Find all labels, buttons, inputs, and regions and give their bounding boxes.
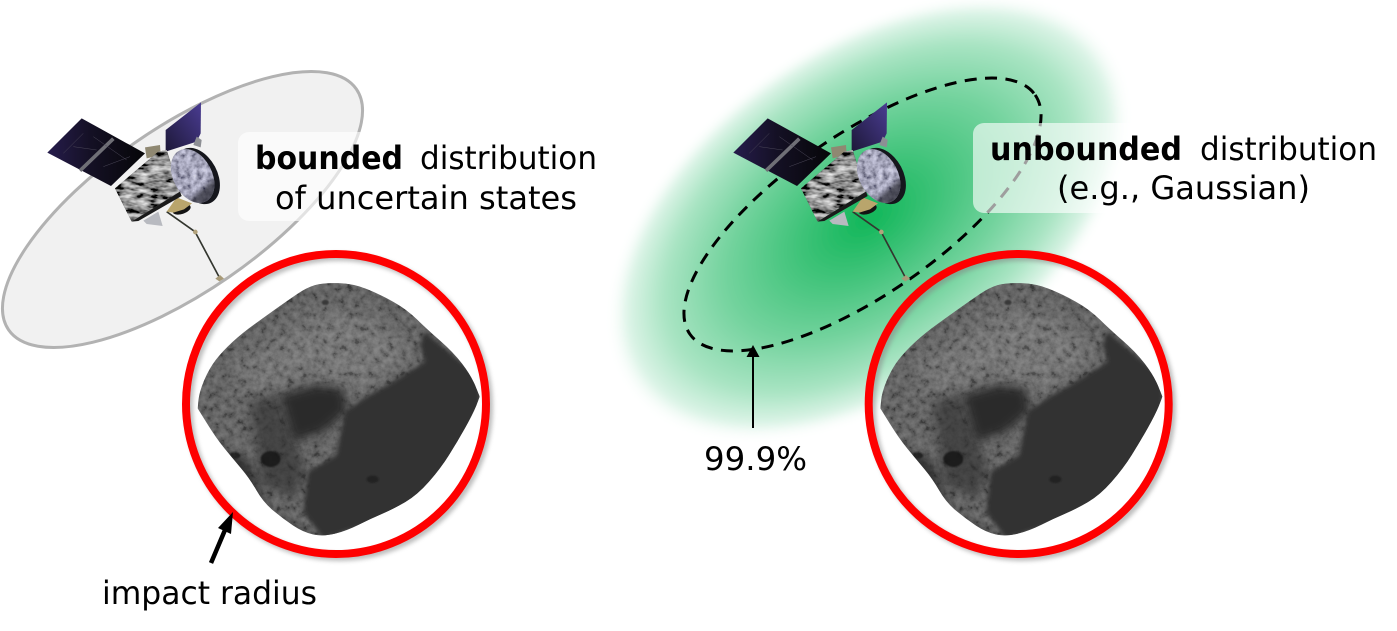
unbounded label: distribution	[1200, 130, 1377, 168]
panel: bounded distribution	[0, 22, 608, 612]
panel: unbounded distribution	[526, 0, 1397, 557]
bounded label: bounded	[255, 139, 403, 177]
arrow: 99.9 percent	[746, 345, 760, 428]
spacecraft: unbounded panel	[733, 102, 915, 281]
arrow: impact radius	[211, 512, 233, 563]
spacecraft: bounded panel	[47, 102, 229, 281]
99.9 percent label: 99.9%	[704, 440, 807, 478]
asteroid: bounded panel	[193, 278, 487, 542]
label background: unbounded	[973, 123, 1397, 213]
bounded label: of uncertain states	[275, 179, 577, 217]
unbounded label: (e.g., Gaussian)	[1057, 169, 1310, 207]
unbounded label: unbounded	[990, 130, 1182, 168]
bounded label: distribution	[420, 139, 597, 177]
asteroid: unbounded panel	[876, 278, 1169, 542]
gaussian glow	[526, 0, 1212, 533]
impact radius ring	[869, 254, 1172, 557]
label background: bounded	[238, 132, 608, 221]
99.9 percent dashed ellipse	[644, 29, 1081, 400]
impact radius ring	[186, 254, 489, 557]
bounded uncertainty ellipse	[0, 22, 403, 397]
impact radius label: impact radius	[102, 574, 317, 612]
